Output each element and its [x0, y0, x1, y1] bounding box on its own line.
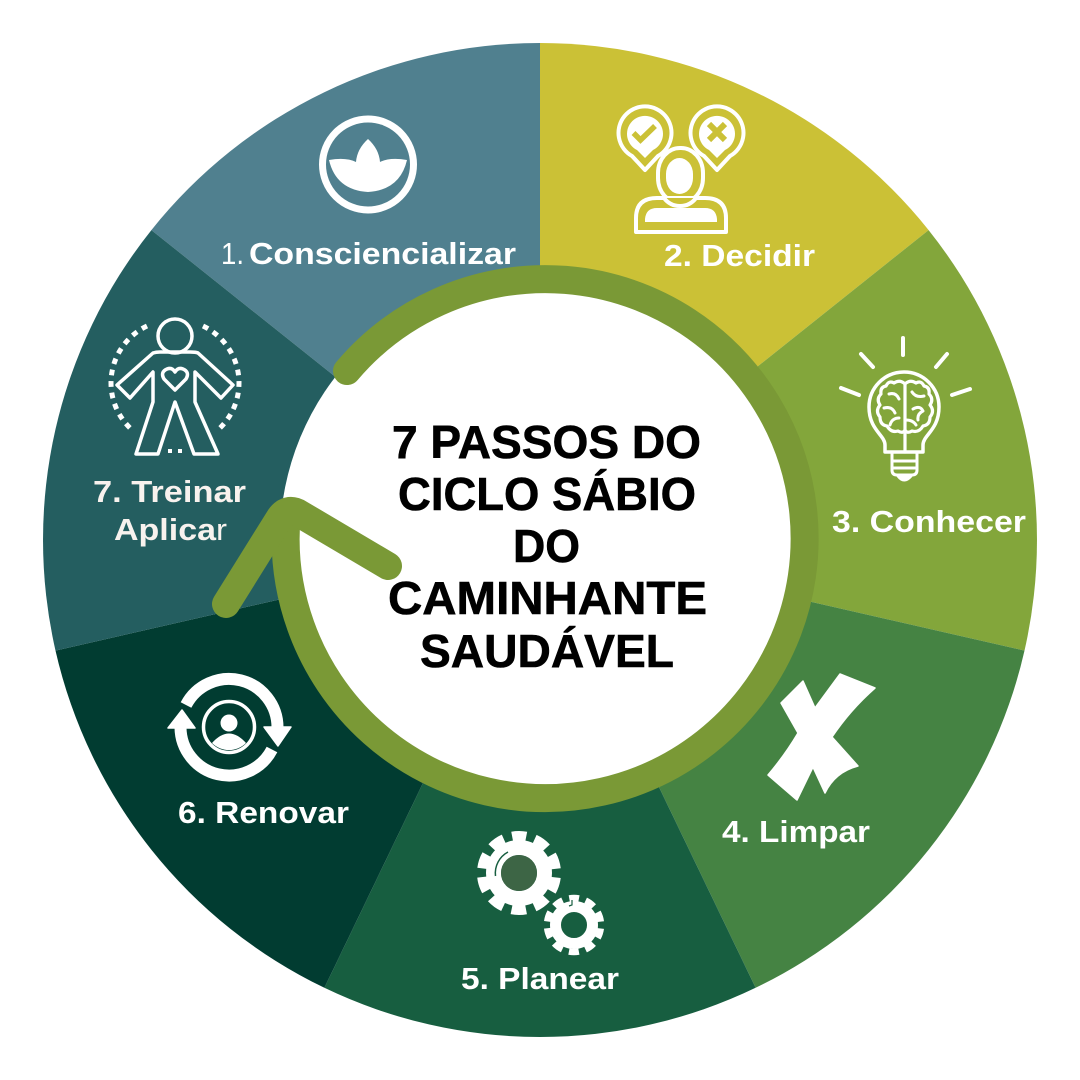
left bubble — [618, 106, 671, 170]
label 4: 4. Limpar — [722, 814, 870, 849]
title — [388, 416, 707, 677]
large gear — [482, 836, 556, 910]
title: CAMINHANTE — [388, 572, 707, 624]
label 6: 6. Renovar — [178, 795, 349, 830]
segment 6 — [56, 540, 540, 988]
label 7 — [93, 474, 246, 547]
segment 4 — [540, 540, 1024, 988]
right bubble — [691, 106, 744, 170]
label 2: 2. Decidir — [664, 238, 815, 273]
icon: gears — [482, 836, 601, 952]
white centre disc — [280, 274, 810, 804]
label 1: Consciencializar — [249, 236, 516, 271]
segment 1 — [151, 43, 540, 540]
icon: renew person — [168, 679, 291, 776]
label 5: 5. Planear — [461, 961, 619, 996]
icon: brain bulb — [841, 338, 970, 480]
title: 7 PASSOS DO — [392, 416, 701, 468]
small gear — [547, 898, 601, 952]
icon: crossed X — [768, 674, 875, 800]
title: DO — [513, 520, 580, 572]
segment 2 — [540, 43, 929, 540]
body — [636, 198, 726, 232]
label 7: 7. Treinar — [93, 474, 246, 509]
icon: decision person — [618, 106, 744, 232]
label 7: r — [216, 512, 227, 547]
icon: body with heart — [111, 319, 239, 454]
title: SAUDÁVEL — [420, 625, 674, 677]
title: CICLO SÁBIO — [398, 468, 696, 520]
icon: lotus — [322, 119, 414, 210]
label 3: 3. Conhecer — [832, 504, 1026, 539]
segment 7 — [43, 230, 540, 651]
label 7: Aplica — [114, 512, 217, 547]
cycle arrow — [226, 279, 805, 798]
head — [658, 148, 703, 203]
segment 3 — [540, 230, 1037, 651]
label 1: 1. — [221, 236, 244, 271]
segment 5 — [324, 540, 756, 1037]
